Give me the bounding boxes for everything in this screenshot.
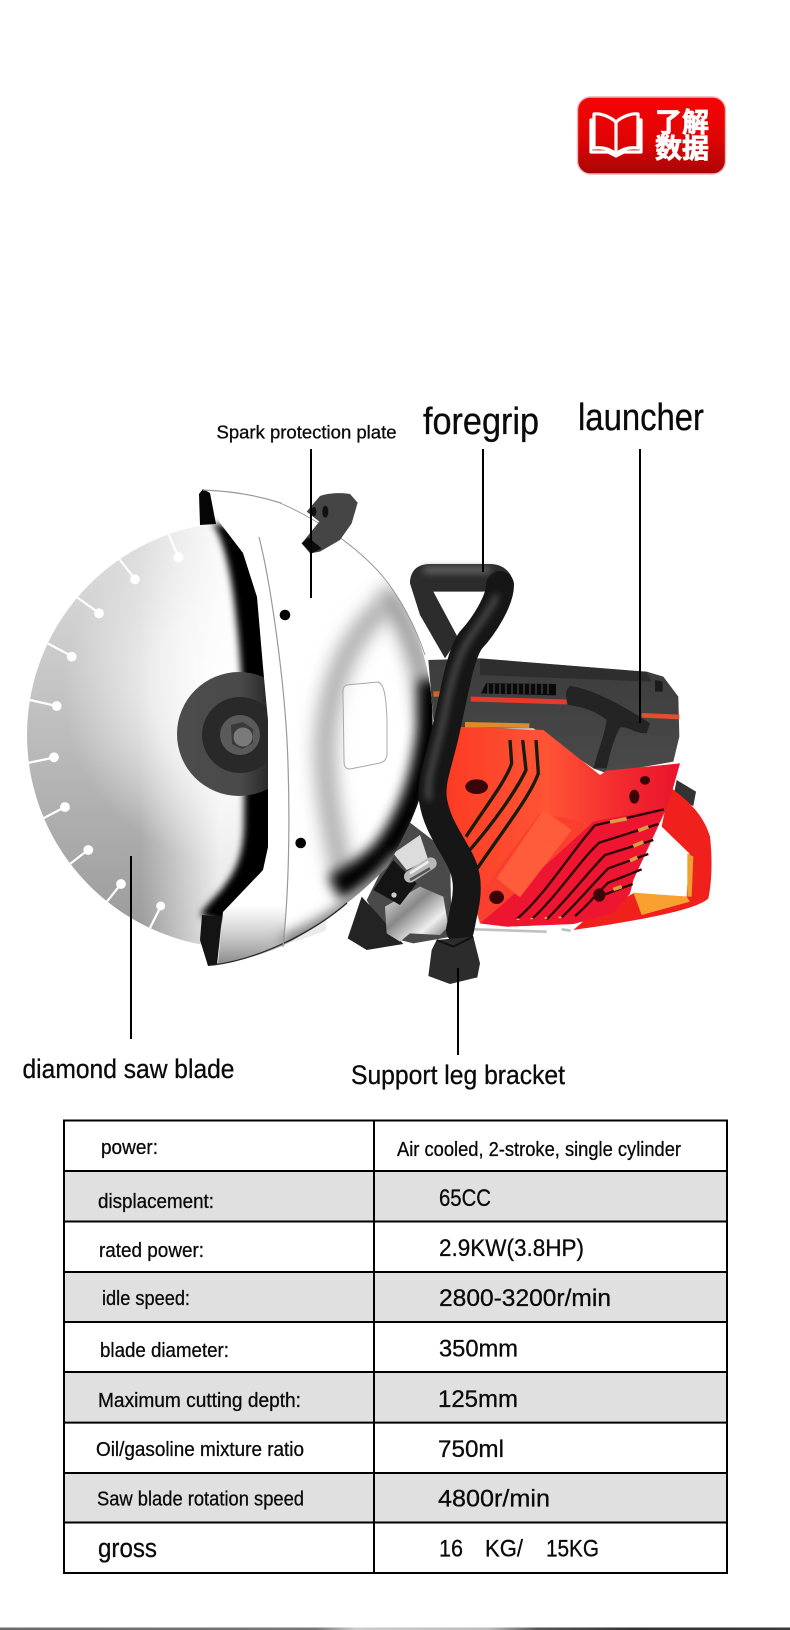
label: spark protection plate: Spark protection plate bbox=[216, 422, 396, 442]
row: blade rotation speed: 4800r/min bbox=[438, 1486, 550, 1512]
badge: learn data button: 数据 bbox=[655, 134, 709, 164]
row: rated power: rated power: bbox=[99, 1240, 204, 1262]
row: gross bbox=[98, 1533, 599, 1563]
left louvres bbox=[466, 740, 538, 868]
label: launcher: launcher bbox=[578, 397, 704, 439]
row: gross: KG/ bbox=[485, 1536, 523, 1562]
row: blade rotation speed: Saw blade rotation speed bbox=[97, 1488, 304, 1510]
row: gross: 16 bbox=[439, 1536, 463, 1562]
row: gross: 15KG bbox=[546, 1536, 599, 1562]
guard window bbox=[343, 682, 387, 769]
row: blade diameter: 350mm bbox=[439, 1336, 518, 1362]
row: oil gasoline ratio: Oil/gasoline mixture ratio bbox=[96, 1439, 304, 1461]
saw blade bbox=[26, 520, 326, 950]
guard top and bottom tabs bbox=[199, 489, 216, 525]
label: diamond saw blade: diamond saw blade bbox=[22, 1054, 234, 1084]
spec table bbox=[64, 1120, 727, 1573]
body holes bbox=[465, 776, 650, 904]
label: support leg bracket: Support leg bracket bbox=[351, 1060, 565, 1090]
saw illustration bbox=[26, 488, 712, 984]
row: power: power: bbox=[101, 1137, 158, 1159]
row: rated power: 2.9KW(3.8HP) bbox=[439, 1235, 584, 1262]
guard dots bbox=[280, 610, 290, 620]
row: gross: gross bbox=[98, 1533, 157, 1563]
lower mechanism bbox=[348, 820, 452, 950]
icon: open book bbox=[591, 114, 641, 156]
guard grip tab bbox=[302, 493, 358, 553]
engine housing bbox=[428, 658, 712, 932]
row: displacement bbox=[98, 1185, 491, 1213]
row: maximum cutting depth bbox=[98, 1386, 518, 1413]
row: oil gasoline ratio: 750ml bbox=[438, 1436, 504, 1463]
row: oil gasoline ratio bbox=[96, 1436, 504, 1463]
red engine body bbox=[440, 727, 680, 927]
bottom gradient strip bbox=[0, 1628, 790, 1630]
foregrip handle bbox=[410, 564, 514, 930]
row: blade rotation speed bbox=[97, 1486, 550, 1512]
row: idle speed: 2800-3200r/min bbox=[439, 1285, 611, 1312]
row: idle speed bbox=[102, 1285, 611, 1312]
badge: learn data button bbox=[578, 97, 726, 174]
row: rated power bbox=[99, 1235, 584, 1262]
blade guard bbox=[199, 488, 433, 966]
row: displacement: displacement: bbox=[98, 1191, 214, 1213]
louvre panel bbox=[477, 807, 665, 927]
row: blade diameter bbox=[100, 1336, 518, 1362]
blade hub bbox=[177, 672, 301, 796]
row: idle speed: idle speed: bbox=[102, 1288, 190, 1310]
guard inner shadow bbox=[200, 523, 280, 925]
top engine cover bbox=[428, 658, 679, 773]
label: foregrip: foregrip bbox=[423, 401, 539, 443]
row: blade diameter: blade diameter: bbox=[100, 1340, 229, 1362]
pull starter handle bbox=[566, 686, 650, 768]
support foot bbox=[428, 937, 480, 984]
rear handle bbox=[573, 780, 712, 930]
row: maximum cutting depth: 125mm bbox=[438, 1386, 518, 1413]
guard crease line bbox=[259, 537, 289, 947]
row: power: Air cooled, 2-stroke, single cylinder bbox=[397, 1139, 681, 1161]
row: power bbox=[101, 1137, 681, 1161]
row: maximum cutting depth: Maximum cutting depth: bbox=[98, 1390, 301, 1412]
row: displacement: 65CC bbox=[439, 1185, 491, 1212]
badge text: 了解 bbox=[655, 108, 709, 138]
